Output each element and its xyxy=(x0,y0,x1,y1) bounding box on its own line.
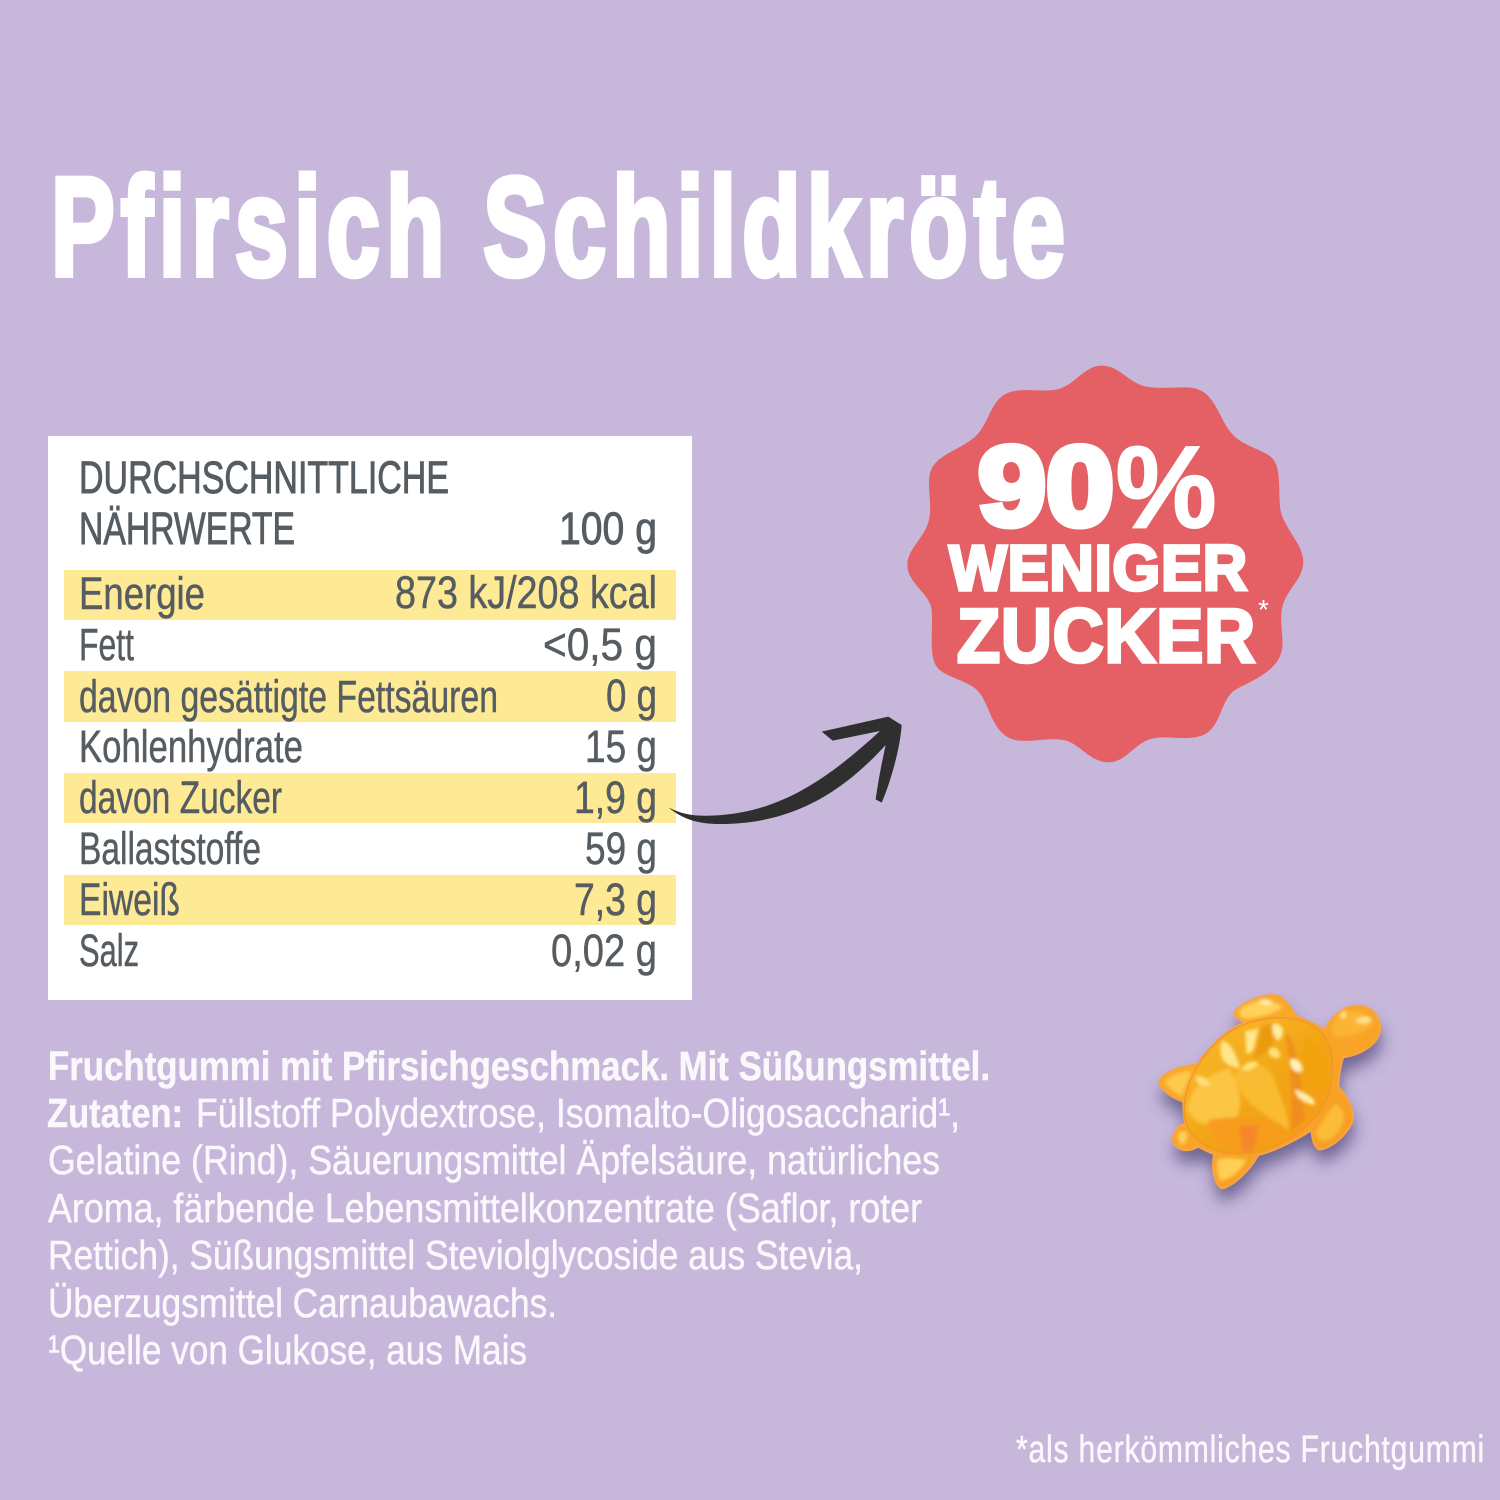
row: davon Zucker xyxy=(79,772,657,823)
row: Ballaststoffe: Ballaststoffe xyxy=(79,823,261,874)
ingredients text: Füllstoff Polydextrose, Isomalto-Oligosaccharid¹, xyxy=(196,1090,960,1136)
table header: 100 g xyxy=(559,503,657,554)
row: Eiweiß: 7,3 g xyxy=(574,874,657,925)
row: Eiweiß xyxy=(79,874,657,925)
row: Kohlenhydrate: Kohlenhydrate xyxy=(79,721,303,772)
row: davon Zucker: 1,9 g xyxy=(574,772,657,823)
turtle shadow xyxy=(1160,1008,1381,1201)
row: Salz: 0,02 g xyxy=(551,925,657,976)
ingredients text: Überzugsmittel Carnaubawachs. xyxy=(48,1280,557,1326)
arrow: sugar to badge xyxy=(668,717,902,824)
row: Energie xyxy=(79,567,657,619)
ingredients text: Zutaten: xyxy=(47,1090,183,1136)
panel: nutrition table xyxy=(48,436,692,1000)
row: Kohlenhydrate xyxy=(79,721,657,772)
badge text xyxy=(949,424,1269,679)
turtle silhouette xyxy=(1159,995,1380,1188)
row: Salz xyxy=(79,925,657,976)
badge text: WENIGER xyxy=(949,532,1248,604)
badge text: % xyxy=(1116,425,1216,550)
turtle shell xyxy=(1184,1018,1333,1154)
row: Kohlenhydrate: 15 g xyxy=(585,721,657,772)
table header xyxy=(79,452,657,554)
ingredients text xyxy=(47,1043,990,1373)
table header: DURCHSCHNITTLICHE xyxy=(79,452,449,503)
row: Fett: <0,5 g xyxy=(543,619,657,670)
badge: 90% weniger Zucker xyxy=(907,366,1303,762)
row: Eiweiß: Eiweiß xyxy=(79,874,180,925)
badge text: 90 xyxy=(978,424,1114,549)
ingredients text: Fruchtgummi mit Pfirsichgeschmack. Mit Süßungsmittel. xyxy=(48,1043,990,1089)
row: davon Zucker: davon Zucker xyxy=(79,772,282,823)
row: Energie: Energie xyxy=(79,568,205,619)
icon: peach turtle gummy xyxy=(1159,995,1381,1201)
row: Fett: Fett xyxy=(79,619,134,670)
row: Salz: Salz xyxy=(79,925,139,976)
table header: NÄHRWERTE xyxy=(79,503,295,554)
badge shape xyxy=(907,366,1303,762)
badge text: * xyxy=(1258,594,1269,625)
row: gesättigte Fettsäuren: 0 g xyxy=(606,670,657,721)
ingredients text: Rettich), Süßungsmittel Steviolglycoside aus Stevia, xyxy=(48,1232,863,1278)
turtle highlights xyxy=(1165,999,1373,1181)
row: Energie: 873 kJ/208 kcal xyxy=(395,567,657,618)
ingredients text: Gelatine (Rind), Säuerungsmittel Äpfelsäure, natürliches xyxy=(48,1137,940,1183)
badge text: ZUCKER xyxy=(957,594,1256,679)
table row highlights xyxy=(64,570,676,925)
row: Ballaststoffe: 59 g xyxy=(585,823,657,874)
row: Fett xyxy=(79,619,657,670)
row: gesättigte Fettsäuren: davon gesättigte Fettsäuren xyxy=(79,671,498,722)
row: Ballaststoffe xyxy=(79,823,657,874)
ingredients text: Aroma, färbende Lebensmittelkonzentrate (Saflor, roter xyxy=(48,1185,922,1231)
ingredients text: ¹Quelle von Glukose, aus Mais xyxy=(48,1327,527,1373)
